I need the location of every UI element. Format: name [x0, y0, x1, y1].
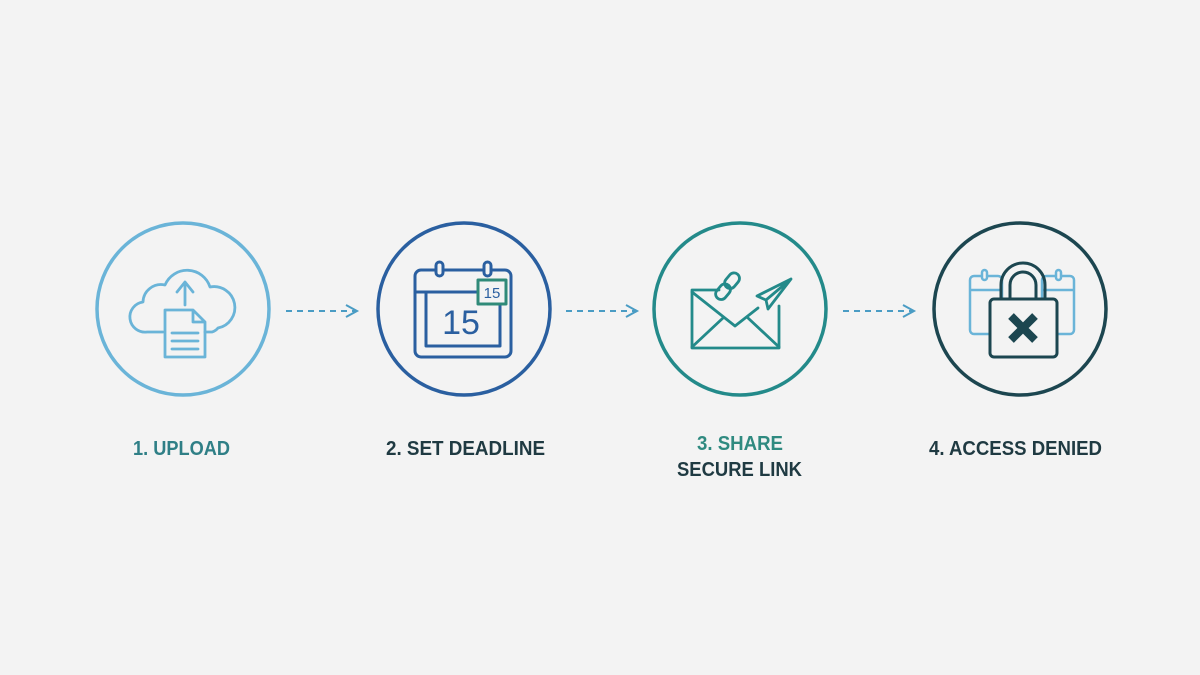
icon: envelope with link and paper plane — [692, 271, 791, 348]
arrow 2 — [566, 305, 637, 317]
label 1: 1. UPLOAD — [133, 438, 230, 460]
circle 3 — [654, 223, 826, 395]
icon: calendar: 15 — [442, 304, 480, 342]
arrow 3 — [843, 305, 914, 317]
label 3: 3. SHARE — [697, 433, 783, 455]
step 4: access denied — [934, 223, 1106, 395]
step 2: set deadline — [378, 223, 550, 395]
label 2: 2. SET DEADLINE — [386, 438, 545, 460]
circle 4 — [934, 223, 1106, 395]
step 3: share secure link — [654, 223, 826, 395]
icon: calendar: 15 — [484, 285, 500, 302]
icon: cloud upload — [130, 270, 235, 357]
label 3 — [677, 433, 803, 481]
circle 2 — [378, 223, 550, 395]
label 3: SECURE LINK — [677, 459, 803, 481]
icon: calendar — [415, 262, 511, 357]
icon: lock over calendars — [970, 263, 1074, 357]
step 1: upload — [97, 223, 269, 395]
circle 1 — [97, 223, 269, 395]
arrow 1 — [286, 305, 357, 317]
label 4: 4. ACCESS DENIED — [929, 438, 1102, 460]
